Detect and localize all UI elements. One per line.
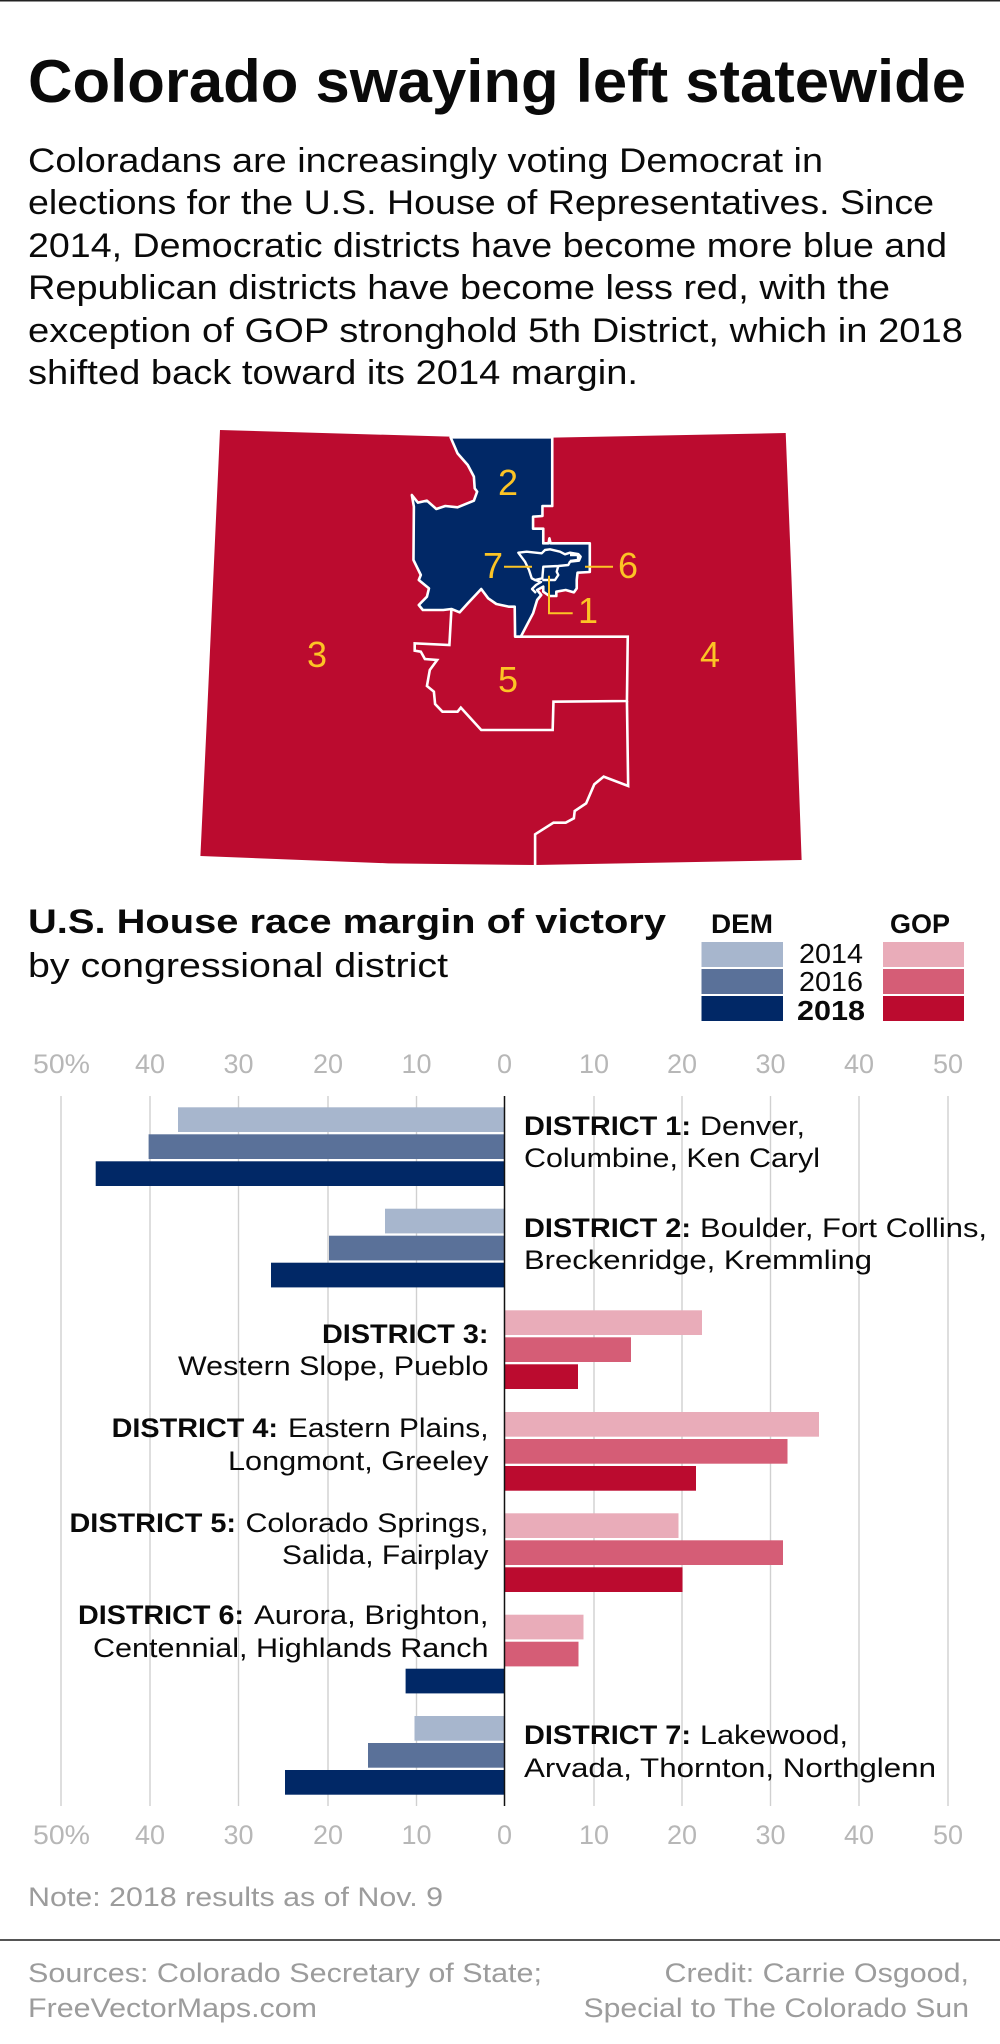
bottom axis labels: 20 [667,1820,697,1850]
district 2 label: Boulder, Fort Collins, [700,1213,987,1243]
label: district 1 with leader [549,576,598,631]
district 2 label: DISTRICT 2: [524,1213,691,1243]
bottom axis labels [33,1820,963,1850]
bottom axis labels: 20 [313,1820,343,1850]
district 6 label: DISTRICT 6: [78,1600,244,1630]
district 2 bars [271,1209,504,1287]
sources [28,1958,542,2023]
district 2 label [524,1213,987,1275]
top axis labels [33,1049,963,1079]
district 3 bars [504,1310,702,1389]
top axis labels: 40 [844,1049,874,1079]
district 4 label: DISTRICT 4: [112,1413,278,1443]
district 4 label: Eastern Plains, [288,1413,488,1443]
Denver metro inner boundaries [518,549,581,593]
intro text block: elections for the U.S. House of Representatives. Since [28,184,934,222]
label: district 7 with leader [483,545,532,586]
legend: 2014 [799,938,863,969]
bottom axis labels: 0 [497,1820,512,1850]
label: district 2: 2 [498,462,518,503]
Democratic districts, blue [412,437,590,637]
intro text block: exception of GOP stronghold 5th District, which in 2018 [28,312,963,350]
bottom axis labels: 30 [755,1820,786,1850]
label: district 4: 4 [700,634,720,675]
intro text block [28,142,963,392]
label: district 7 with leader: 7 [483,545,503,586]
top axis labels: 30 [755,1049,786,1079]
district 6 label: Aurora, Brighton, [254,1600,488,1630]
label: district 5: 5 [498,659,518,700]
bottom axis labels: 40 [844,1820,874,1850]
bottom axis labels: 50 [933,1820,963,1850]
intro text block: Republican districts have become less red, with the [28,269,890,307]
label: district 3: 3 [307,634,327,675]
district 1 bars [96,1107,504,1186]
district 6 label: Centennial, Highlands Ranch [93,1633,488,1663]
district 1 label: Columbine, Ken Caryl [524,1143,820,1173]
intro text block: Coloradans are increasingly voting Democrat in [28,142,823,180]
district 5 label: DISTRICT 5: [70,1508,236,1538]
legend: GOP [890,909,950,939]
state of Colorado, red districts [200,430,802,865]
district 7 label: Arvada, Thornton, Northglenn [524,1753,936,1783]
district 4 bars [504,1412,819,1491]
top axis labels: 50 [933,1049,963,1079]
top axis labels: 20 [313,1049,343,1079]
district 3 label [178,1319,488,1381]
top axis labels: 10 [401,1049,432,1079]
map of Colorado congressional districts [200,430,802,865]
district 5 label: Colorado Springs, [246,1508,488,1538]
district 5 boundary [415,609,628,730]
label: district 6 with leader: 6 [618,545,638,586]
chart heading: by congressional district [28,947,449,985]
top axis labels: 20 [667,1049,697,1079]
top axis labels: 30 [223,1049,254,1079]
credit: Credit: Carrie Osgood, [664,1958,969,1988]
district 5 label [70,1508,489,1570]
district 1 label: Denver, [700,1111,805,1141]
chart heading [28,903,666,985]
district 3 label: Western Slope, Pueblo [178,1351,488,1381]
legend [702,909,964,1026]
district 7 bars [285,1716,504,1795]
district 7 label: DISTRICT 7: [524,1720,691,1750]
top axis labels: 50% [33,1049,90,1079]
district 6 bars [406,1615,584,1693]
intro text block: shifted back toward its 2014 margin. [28,354,638,392]
top axis labels: 0 [497,1049,512,1079]
district 2 label: Breckenridge, Kremmling [524,1245,872,1275]
district 6 label [78,1600,488,1663]
district 1 label: DISTRICT 1: [524,1111,691,1141]
district 1 label [524,1111,820,1173]
sources: Sources: Colorado Secretary of State; [28,1958,542,1988]
district 4 label: Longmont, Greeley [228,1446,489,1476]
district 4 label [112,1413,489,1476]
bottom axis labels: 10 [579,1820,609,1850]
legend: 2016 [799,966,863,997]
note: Note: 2018 results as of Nov. 9 [28,1882,443,1912]
district 3 label: DISTRICT 3: [322,1319,488,1349]
district 7 label [524,1720,936,1783]
credit: Special to The Colorado Sun [584,1993,969,2023]
top axis labels: 10 [579,1049,609,1079]
bottom axis labels: 40 [135,1820,165,1850]
legend: 2018 [797,995,865,1026]
district 5 bars [504,1513,783,1592]
credit [584,1958,969,2023]
bar chart [61,1096,987,1806]
label: district 6 with leader [585,545,638,586]
bottom axis labels: 10 [401,1820,432,1850]
chart heading: U.S. House race margin of victory [28,903,666,941]
intro text block: 2014, Democratic districts have become more blue and [28,227,947,265]
label: district 1 with leader: 1 [578,590,598,631]
top axis labels: 40 [135,1049,165,1079]
district 7 label: Lakewood, [700,1720,848,1750]
bottom axis labels: 30 [223,1820,254,1850]
bottom axis labels: 50% [33,1820,90,1850]
district 5 label: Salida, Fairplay [282,1540,489,1570]
title: Colorado swaying left statewide [28,48,966,115]
legend: DEM [711,909,773,939]
district 3 and 4 boundary [535,701,628,865]
sources: FreeVectorMaps.com [28,1993,317,2023]
